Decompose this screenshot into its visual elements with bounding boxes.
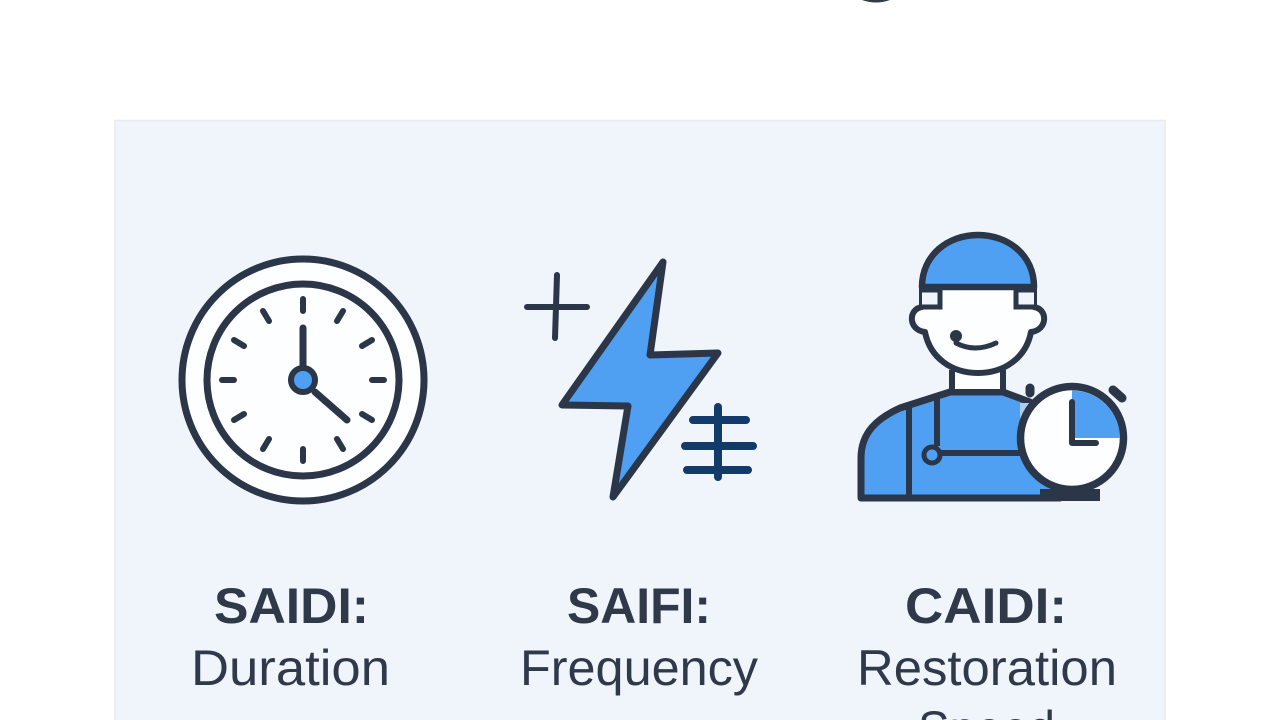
metric label: CAIDI <box>857 578 1117 720</box>
stopwatch <box>1020 386 1124 490</box>
metric label: SAIFI: Frequency <box>520 640 758 696</box>
metric label: CAIDI: CAIDI: <box>905 578 1067 634</box>
smile <box>956 343 996 348</box>
metric label: SAIDI <box>191 578 390 696</box>
metric label: SAIFI <box>520 578 758 696</box>
metric label: SAIFI: SAIFI: <box>567 578 711 634</box>
cap <box>922 235 1034 287</box>
straps <box>909 396 1022 498</box>
icon: clock <box>182 259 424 501</box>
icon: technician with stopwatch <box>861 235 1124 501</box>
metric label: CAIDI: Restoration <box>857 640 1117 696</box>
metric label: SAIDI: SAIDI: <box>214 578 369 634</box>
technician body <box>861 392 1060 498</box>
icon: lightning bolt with plus and grid symbol <box>527 262 753 497</box>
neck <box>952 370 1003 392</box>
title descender fragment <box>862 0 890 2</box>
metric label: SAIDI: Duration <box>191 640 390 696</box>
panel: reliability metrics <box>115 120 1165 720</box>
head <box>912 287 1044 373</box>
